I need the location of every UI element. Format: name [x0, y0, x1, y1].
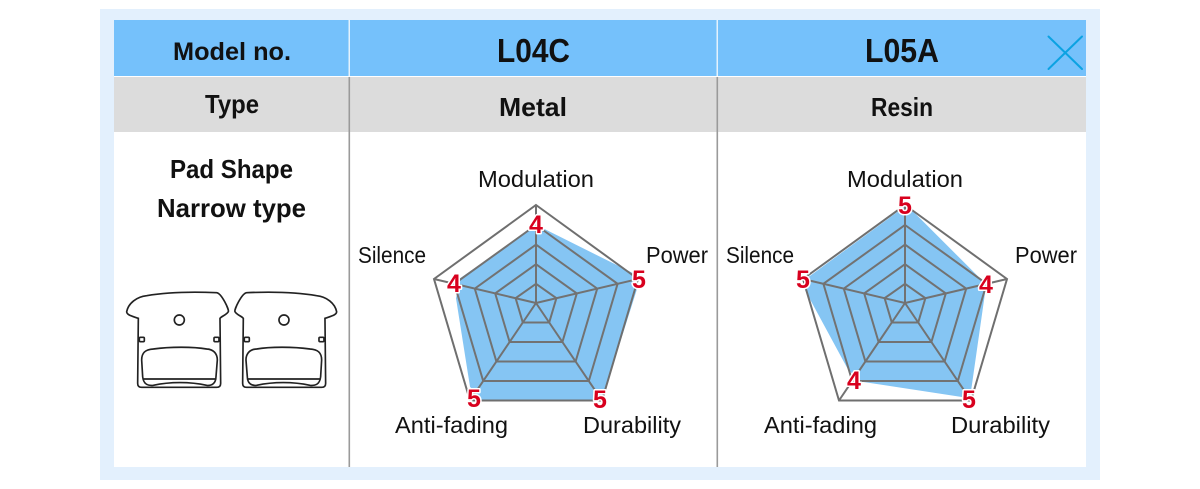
value: Power 5: 5: [632, 266, 646, 294]
heading: L04C: L04C: [497, 32, 570, 69]
text: Pad Shape: Pad Shape: [170, 154, 293, 184]
column divider: second, body: [716, 77, 718, 467]
icon: cross mark: [1048, 36, 1082, 69]
value: Silence 5: 5: [796, 266, 810, 294]
column divider: first, header: [348, 20, 350, 76]
value: Modulation 4: 4: [529, 211, 543, 239]
radar chart: L04C: [358, 166, 708, 438]
column divider: first, body: [348, 77, 350, 467]
heading: Model no.: Model no.: [173, 38, 291, 66]
row: type: [114, 77, 1086, 132]
axis: Modulation: Modulation: [478, 166, 594, 192]
data area: [456, 229, 637, 401]
column divider: second, header: [716, 20, 718, 76]
text: Narrow type: Narrow type: [157, 193, 306, 223]
axis: Durability: Durability: [583, 412, 681, 438]
label: Resin: Resin: [871, 92, 933, 122]
axis: Silence: Silence: [358, 242, 426, 268]
value: Durability 5: 5: [962, 386, 976, 414]
axis: Durability: Durability: [951, 412, 1051, 438]
value: Modulation 5: 5: [898, 192, 912, 220]
value: Durability 5: 5: [593, 386, 607, 414]
value: Anti-fading 4: 4: [847, 367, 861, 395]
label: Metal: Metal: [499, 92, 567, 122]
label: Type: Type: [205, 89, 259, 119]
value: Power 4: 4: [979, 271, 993, 299]
grid: [803, 205, 1007, 400]
axis: Power: Power: [646, 242, 708, 268]
icon: left brake pad: [127, 292, 228, 387]
value: Silence 4: 4: [447, 270, 461, 298]
axis: Power: Power: [1015, 242, 1077, 268]
axis: Anti-fading: Anti-fading: [395, 412, 508, 438]
panel: comparison table: [114, 20, 1086, 467]
data area: [805, 205, 985, 398]
icon: right brake pad: [235, 292, 337, 387]
axis: Anti-fading: Anti-fading: [764, 412, 877, 438]
radar chart: L05A: [726, 166, 1077, 438]
axis: Modulation: Modulation: [847, 166, 963, 192]
heading: L05A: L05A: [865, 32, 939, 69]
header row: model number: [114, 20, 1086, 76]
axis: Silence: Silence: [726, 242, 794, 268]
grid: [434, 205, 638, 400]
value: Anti-fading 5: 5: [467, 385, 481, 413]
